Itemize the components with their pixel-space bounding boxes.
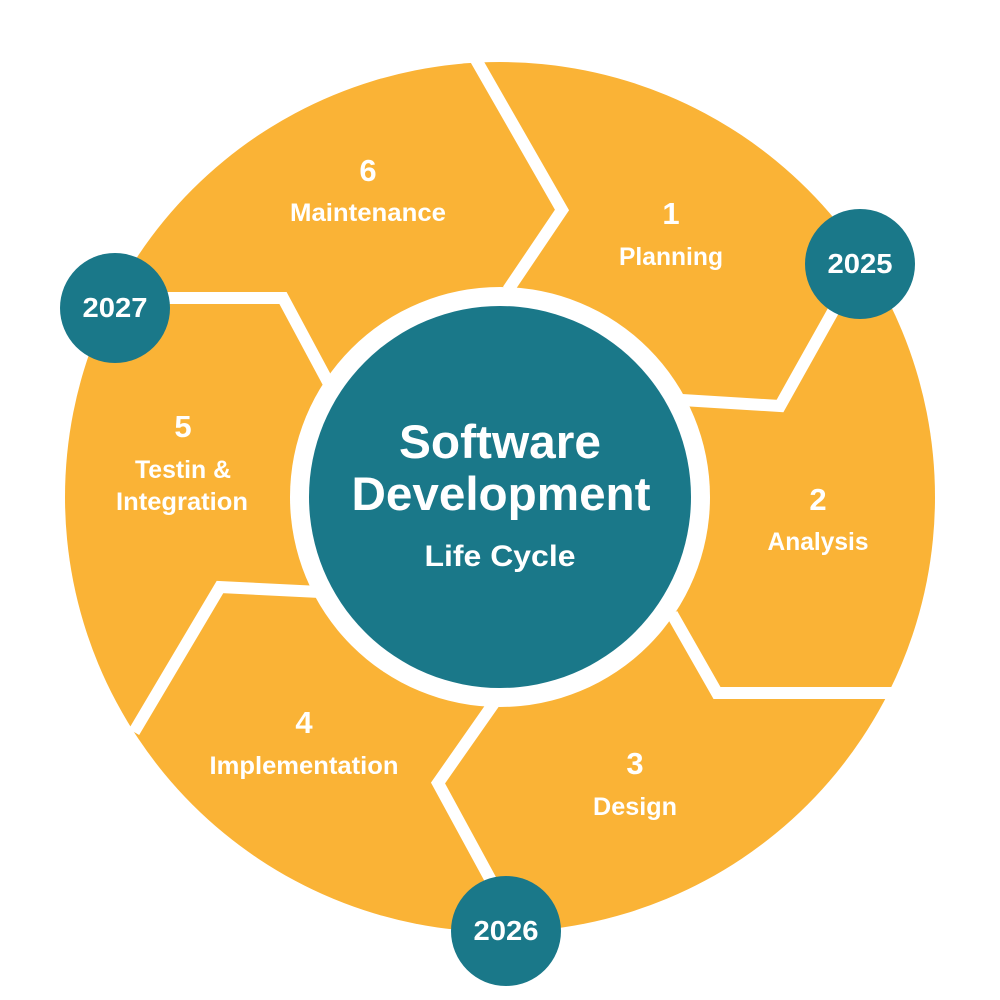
year badge 2025 xyxy=(805,209,915,319)
segment 6: maintenance: 6 xyxy=(359,153,377,188)
segment 6: maintenance: Maintenance xyxy=(290,199,446,227)
segment 4: implementation: 4 xyxy=(295,705,313,740)
segment 5: testing and integration: 5 xyxy=(174,409,192,444)
year badge 2026 xyxy=(451,876,561,986)
segment 2: analysis: 2 xyxy=(809,482,827,517)
segment 3: design: Design xyxy=(593,793,677,821)
center white ring xyxy=(290,287,710,707)
segment 3: design xyxy=(593,746,677,821)
center title: Software xyxy=(399,415,601,468)
segment 2: analysis xyxy=(768,482,868,556)
segment 2: analysis: Analysis xyxy=(768,528,868,556)
year badge 2027: 2027 xyxy=(82,292,148,323)
segment 5: testing and integration xyxy=(116,409,248,516)
segment 6: maintenance xyxy=(290,153,446,227)
segment 1: planning xyxy=(619,196,723,271)
year badge 2025: 2025 xyxy=(828,248,892,279)
year badge 2026: 2026 xyxy=(474,915,538,946)
segment 3: design: 3 xyxy=(626,746,644,781)
center title xyxy=(352,415,651,573)
segment separators xyxy=(134,58,896,886)
outer orange ring xyxy=(65,62,935,932)
segment 1: planning: 1 xyxy=(662,196,680,231)
center title: Development xyxy=(352,467,651,520)
segment 1: planning: Planning xyxy=(619,243,723,271)
year badge 2027 xyxy=(60,253,170,363)
segment 4: implementation: Implementation xyxy=(210,752,398,780)
segment 5: testing and integration: Testin & xyxy=(135,456,231,484)
segment 4: implementation xyxy=(210,705,398,780)
center teal circle xyxy=(309,306,691,688)
segment 5: testing and integration: Integration xyxy=(116,488,248,516)
center title: Life Cycle xyxy=(424,540,576,573)
